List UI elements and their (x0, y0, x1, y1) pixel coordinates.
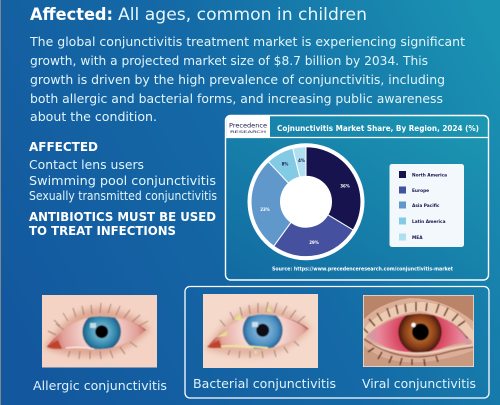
slice: North America: 36% (340, 184, 350, 188)
title: Affected: (30, 5, 113, 24)
legend: North America (412, 172, 447, 178)
caption: bacterial: Bacterial conjunctivitis (193, 376, 336, 391)
chart title: Cojnunctivitis Market Share, By Region, 2024 (%) (277, 124, 479, 133)
affected list: Contact lens users (29, 157, 144, 172)
donut chart (248, 143, 364, 260)
intro paragraph: growth is driven by the high prevalence of conjunctivitis, including (30, 72, 445, 87)
antibiotics callout: TO TREAT INFECTIONS (29, 224, 176, 238)
affected heading: AFFECTED (29, 140, 98, 154)
affected list: Sexually transmitted conjunctivitis (29, 188, 217, 203)
affected list: Swimming pool conjunctivitis (29, 173, 216, 188)
antibiotics callout (29, 210, 216, 238)
slice: Europe: 29% (309, 240, 319, 245)
frame around bacterial and viral (185, 286, 489, 398)
intro paragraph (29, 34, 465, 124)
slice: MEA: 4% (298, 158, 305, 163)
intro paragraph: both allergic and bacterial forms, and increasing public awareness (30, 91, 443, 106)
legend (390, 164, 464, 247)
antibiotics callout: ANTIBIOTICS MUST BE USED (29, 210, 216, 224)
slice: Latin America: 8% (282, 162, 288, 166)
affected list (29, 157, 217, 203)
legend: Latin America (412, 219, 446, 225)
intro paragraph: The global conjunctivitis treatment market is experiencing significant (29, 34, 465, 49)
eye photo: allergic (42, 295, 157, 368)
eye photo: bacterial (203, 294, 318, 368)
logo: Precedence Research: Precedence (229, 122, 267, 130)
caption: viral: Viral conjunctivitis (362, 376, 476, 391)
logo: Precedence Research (226, 116, 270, 137)
source line: Source: https://www.precedenceresearch.com/conjunctivitis-market (272, 266, 454, 272)
intro paragraph: growth, with a projected market size of $8.7 billion by 2034. This (30, 53, 428, 68)
slice: Asia Pacific: 23% (260, 207, 270, 212)
legend: Asia Pacific (412, 203, 440, 209)
legend: MEA (412, 235, 423, 241)
logo: Precedence Research: RESEARCH (230, 130, 267, 134)
legend: Europe (412, 188, 429, 194)
intro paragraph: about the condition. (30, 109, 157, 124)
caption: allergic: Allergic conjunctivitis (33, 378, 167, 393)
panel: market share chart (226, 116, 488, 280)
title: All ages, common in children (118, 5, 367, 24)
eye photo: viral (363, 295, 474, 367)
